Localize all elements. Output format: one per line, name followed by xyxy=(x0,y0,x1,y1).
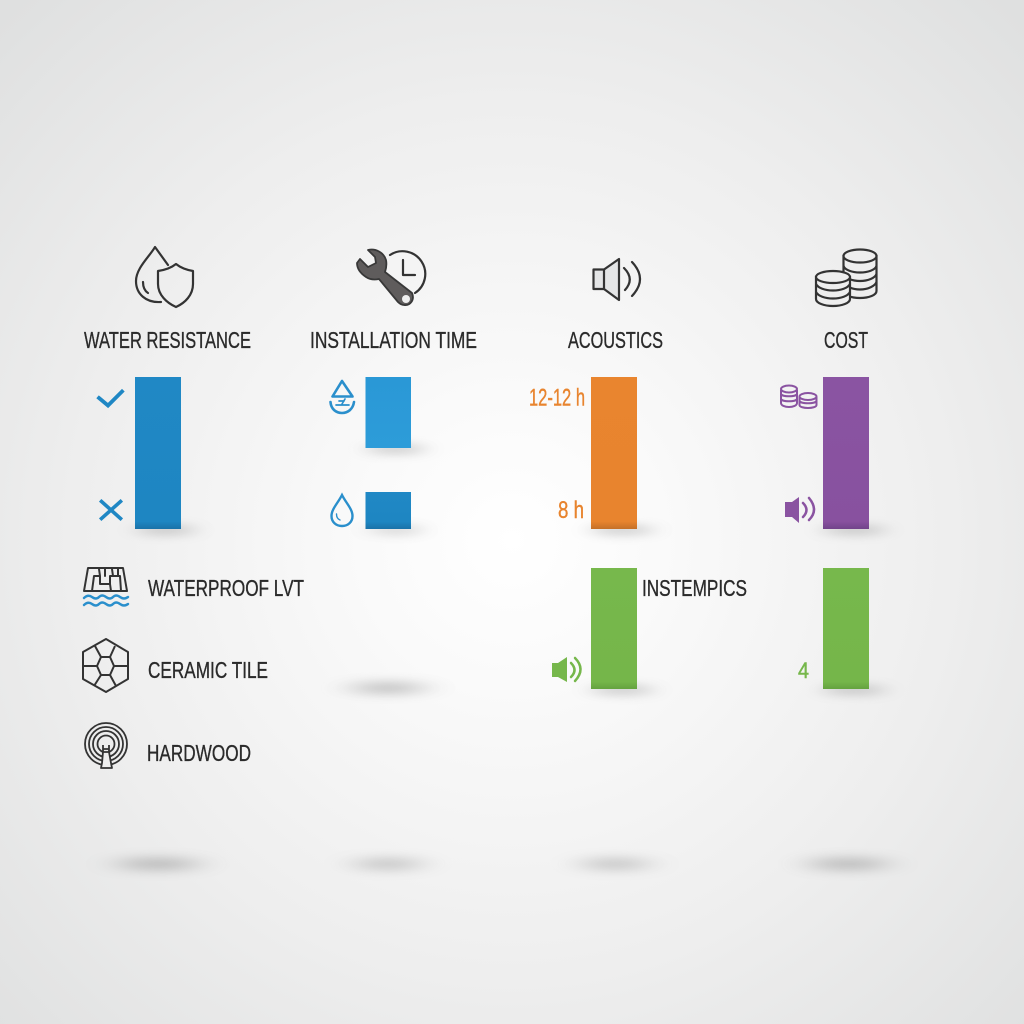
bar: cost green xyxy=(823,568,869,689)
value: 4: 4 xyxy=(798,658,809,683)
icon: purple coins xyxy=(781,386,816,408)
icon: waterproof planks with waves xyxy=(84,568,128,606)
icon: water drop blue xyxy=(332,495,352,526)
bar: installation time lower blue xyxy=(366,492,411,529)
heading: cost: COST xyxy=(824,327,868,353)
icon: green speaker xyxy=(552,657,580,682)
bar: cost purple xyxy=(823,377,869,529)
icon: check mark xyxy=(99,392,122,406)
icon: cross mark xyxy=(102,502,120,518)
heading: installation time: INSTALLATION TIME xyxy=(310,327,477,353)
label: waterproof LVT: WATERPROOF LVT xyxy=(148,575,304,601)
value: 8 h: 8 h xyxy=(558,497,584,524)
heading: water resistance: WATER RESISTANCE xyxy=(84,327,251,353)
icon: wrench and clock xyxy=(357,250,425,305)
icon: purple speaker xyxy=(785,497,814,523)
bar: installation time upper blue xyxy=(366,377,411,448)
icon: coin stacks xyxy=(816,250,876,306)
bar: water resistance blue xyxy=(135,377,181,529)
column headings xyxy=(84,327,868,353)
label: hardwood: HARDWOOD xyxy=(147,740,251,766)
heading: acoustics: ACOUSTICS xyxy=(568,327,663,353)
icon: hardwood tree rings xyxy=(85,723,127,768)
value: 12-12 h: 12-12 h xyxy=(529,384,585,412)
icon: speaker outline xyxy=(594,259,640,300)
floor shadows xyxy=(116,444,888,870)
label: instempics: INSTEMPICS xyxy=(642,575,747,601)
label: ceramic tile: CERAMIC TILE xyxy=(148,657,268,683)
icon: water drop and shield xyxy=(136,247,193,307)
icon: ceramic tile xyxy=(83,639,128,692)
bar: acoustics orange xyxy=(591,377,637,529)
bar: acoustics green xyxy=(591,568,637,689)
icon: triangle and water basin xyxy=(330,381,354,413)
